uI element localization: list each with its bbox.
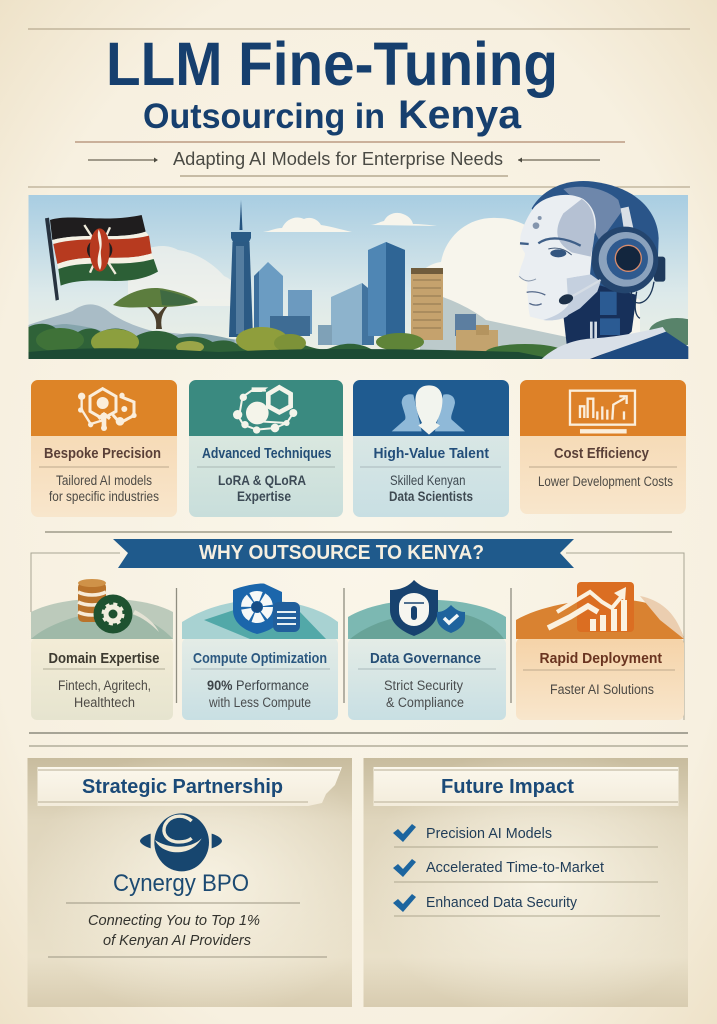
panel: Advanced Techniques <box>189 380 343 517</box>
title <box>106 30 558 137</box>
panel: Cost Efficiency: Cost Efficiency <box>554 445 650 462</box>
subtitle: Adapting AI Models for Enterprise Needs <box>173 149 503 169</box>
panel: Strategic Partnership: of Kenyan AI Providers <box>103 932 251 949</box>
icon: chart on monitor <box>570 391 635 431</box>
icon: shields with lock <box>390 580 465 636</box>
panel: Strategic Partnership: Connecting You to Top 1% <box>88 912 260 929</box>
panel: Bespoke Precision: Bespoke Precision <box>44 445 161 462</box>
clouds <box>128 213 640 345</box>
panel: High-Value Talent <box>353 380 509 517</box>
icon: robot with headset <box>518 181 688 359</box>
heading: why outsource ribbon: WHY OUTSOURCE TO KENYA? <box>199 542 484 564</box>
panel: Bespoke Precision: Tailored AI models <box>56 473 152 488</box>
title: Outsourcing in <box>143 97 385 136</box>
list item: Precision AI Models <box>393 824 658 847</box>
title: LLM Fine-Tuning <box>106 30 558 98</box>
panel: Future Impact <box>364 758 688 1007</box>
list item: Precision AI Models: Precision AI Models <box>426 826 552 842</box>
panel: Compute Optimization: 90% Performance <box>207 677 309 693</box>
panel: Rapid Deployment: Faster AI Solutions <box>550 682 654 697</box>
banner illustration <box>28 181 688 359</box>
panel: Compute Optimization: with Less Compute <box>208 695 311 710</box>
acacia tree <box>113 288 198 329</box>
icon: database and gear <box>78 579 132 634</box>
panel: Cost Efficiency: Lower Development Costs <box>538 474 673 489</box>
panel: Data Governance: Strict Security <box>384 678 463 693</box>
panel: Strategic Partnership <box>28 758 352 1007</box>
panel: Advanced Techniques: LoRA & QLoRA <box>218 472 306 488</box>
title: Kenya <box>398 93 522 137</box>
panel: Strategic Partnership: Cynergy BPO <box>113 870 249 897</box>
icon: gears and nodes <box>233 387 297 434</box>
list item: Accelerated Time-to-Market <box>393 859 658 882</box>
icon: rising chart <box>548 582 634 632</box>
heading: Strategic Partnership: Strategic Partnership <box>82 776 283 798</box>
panel: Advanced Techniques: Expertise <box>237 488 291 504</box>
panel: Cost Efficiency <box>520 380 686 514</box>
panel: High-Value Talent: Data Scientists <box>389 489 473 504</box>
panel: Domain Expertise <box>31 579 173 720</box>
icon: Kenyan flag <box>45 215 158 301</box>
list item: Enhanced Data Security <box>393 894 660 916</box>
panel: Compute Optimization <box>182 583 338 720</box>
panel: Rapid Deployment: Rapid Deployment <box>540 650 662 667</box>
subtitle <box>88 149 600 169</box>
heading: Strategic Partnership <box>38 767 342 806</box>
panel: High-Value Talent: High-Value Talent <box>374 445 489 462</box>
icon: hexagon network <box>78 389 137 431</box>
list item: Enhanced Data Security: Enhanced Data Security <box>426 895 578 911</box>
list item: Accelerated Time-to-Market: Accelerated Time-to-Market <box>426 860 604 876</box>
icon: shield and database <box>233 583 300 634</box>
greenery <box>28 318 688 359</box>
panel: Domain Expertise: Healthtech <box>74 695 135 710</box>
panel: Rapid Deployment <box>516 582 684 720</box>
heading: why outsource ribbon <box>113 539 574 568</box>
panel: Bespoke Precision <box>31 380 177 517</box>
icon: Cynergy BPO logo <box>140 813 222 871</box>
frame around reasons <box>31 553 684 720</box>
heading: Future Impact <box>374 767 678 806</box>
panel: Domain Expertise: Domain Expertise <box>48 650 160 667</box>
panel: Bespoke Precision: for specific industries <box>49 489 159 504</box>
panel: Advanced Techniques: Advanced Techniques <box>202 445 332 462</box>
panel: Data Governance <box>348 580 506 720</box>
skyline <box>229 200 498 352</box>
panel: Data Governance: & Compliance <box>386 695 464 710</box>
panel: High-Value Talent: Skilled Kenyan <box>390 473 466 488</box>
panel: Compute Optimization: Compute Optimization <box>193 650 327 667</box>
heading: Future Impact: Future Impact <box>441 776 574 798</box>
panel: Domain Expertise: Fintech, Agritech, <box>58 678 151 693</box>
panel: Data Governance: Data Governance <box>370 650 481 667</box>
mountains <box>28 304 238 344</box>
icon: talent silhouettes <box>392 385 465 435</box>
